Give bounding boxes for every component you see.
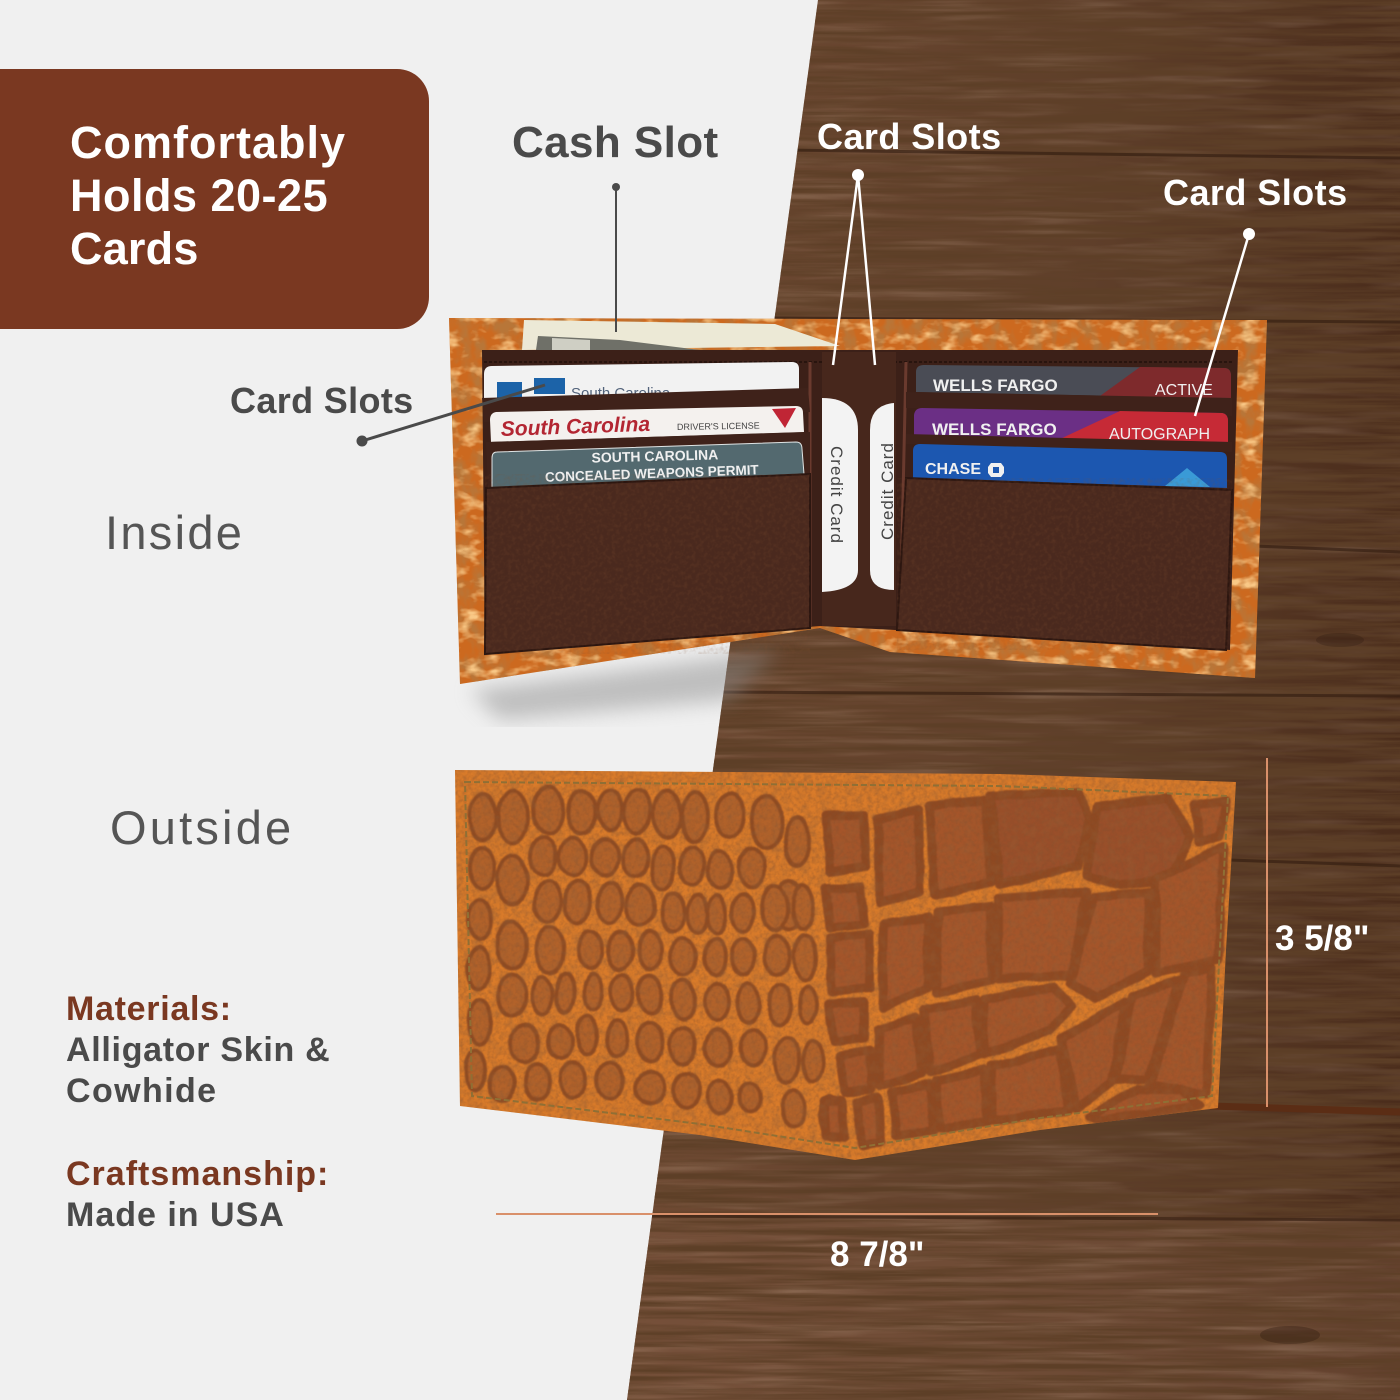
text block: materials: Alligator Skin & xyxy=(66,1031,330,1069)
label: outside: Outside xyxy=(110,801,294,854)
right cards: WELLS FARGO xyxy=(933,376,1058,395)
label: cash slot: Cash Slot xyxy=(512,118,719,167)
label: height dimension: 3 5/8" xyxy=(1275,919,1369,958)
centre credit card left xyxy=(822,398,858,592)
outside wallet xyxy=(450,765,1240,1165)
left cards: CONCEALED WEAPONS PERMIT xyxy=(545,462,760,485)
dark interior xyxy=(482,350,1238,654)
dimension line: height xyxy=(1266,758,1268,1107)
left cards: South Carolina xyxy=(571,385,671,402)
dimension line: width xyxy=(496,1213,1158,1215)
banknote xyxy=(522,320,840,350)
pointer: card slots centre xyxy=(833,169,875,365)
callout: card capacity xyxy=(0,69,429,329)
right cards: CHASE xyxy=(925,461,981,478)
inside wallet shadow xyxy=(470,650,780,720)
right pocket xyxy=(897,478,1232,650)
label: inside: Inside xyxy=(105,506,244,559)
label: card slots left: Card Slots xyxy=(230,380,414,421)
orange leather border xyxy=(449,318,1267,684)
left cards: South Carolina xyxy=(500,413,651,441)
centre credit card right: Credit Card xyxy=(878,442,897,540)
text block: materials: Cowhide xyxy=(66,1072,217,1110)
text block: craftsmanship: Craftsmanship: xyxy=(66,1155,329,1193)
right cards xyxy=(906,365,1232,488)
text block: materials: Materials: xyxy=(66,990,232,1028)
text block: craftsmanship: Made in USA xyxy=(66,1196,285,1234)
label: card slots right: Card Slots xyxy=(1163,172,1348,213)
centre credit card right xyxy=(870,403,897,590)
right cards: ACTIVE xyxy=(1155,382,1213,399)
left cards: DRIVER'S LICENSE xyxy=(677,421,760,432)
pointer: card slots left xyxy=(356,385,545,446)
inside wallet xyxy=(445,315,1270,687)
stitching xyxy=(465,782,1228,1148)
label: width dimension: 8 7/8" xyxy=(830,1235,924,1274)
pointer: card slots right xyxy=(1195,228,1255,416)
small scales xyxy=(466,786,840,1133)
label: card slots centre: Card Slots xyxy=(817,116,1002,157)
large scales xyxy=(824,792,1226,1146)
centre divider xyxy=(822,352,896,626)
centre credit card left: Credit Card xyxy=(827,446,846,544)
callout heading: Cards xyxy=(70,223,199,274)
pointer: cash slot xyxy=(612,183,620,332)
wood background xyxy=(620,0,1400,1400)
left cards: SOUTH CAROLINA xyxy=(591,446,718,466)
right cards: WELLS FARGO xyxy=(932,420,1057,439)
callout heading: Holds 20-25 xyxy=(70,170,328,221)
text block: materials xyxy=(66,990,330,1110)
text block: craftsmanship xyxy=(66,1155,329,1234)
left cards xyxy=(482,362,810,488)
left pocket xyxy=(485,474,810,654)
callout heading xyxy=(70,117,346,274)
callout heading: Comfortably xyxy=(70,117,346,168)
right cards: AUTOGRAPH xyxy=(1109,426,1210,443)
